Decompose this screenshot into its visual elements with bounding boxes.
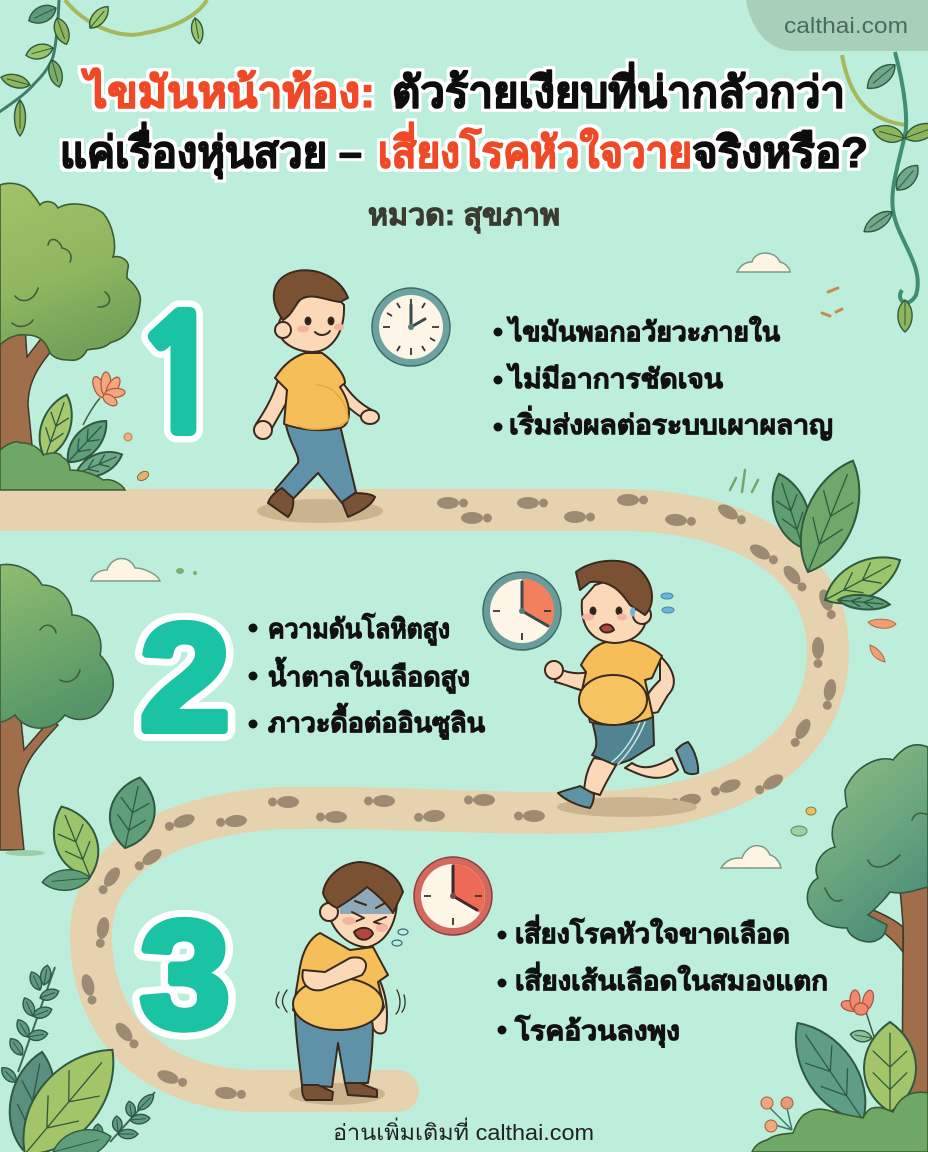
watermark badge: calthai.com — [784, 13, 908, 38]
title — [60, 62, 868, 180]
icon: orange flower — [90, 372, 125, 408]
clock 2 — [483, 572, 561, 650]
head — [278, 285, 344, 352]
bullets 2 — [248, 612, 486, 740]
bullets 3: เสี่ยงเส้นเลือดในสมองแตก — [515, 961, 828, 996]
character 1 walking — [254, 270, 383, 523]
clock 1 — [372, 288, 450, 366]
number 2: 2 — [140, 593, 230, 763]
tree top left — [0, 183, 140, 455]
shirt — [581, 640, 662, 725]
vines top right — [842, 52, 928, 332]
bullets 1: ไขมันพอกอวัยวะภายใน — [506, 316, 781, 347]
character 2 running — [545, 561, 698, 817]
bush bottom right — [752, 1092, 928, 1152]
head — [582, 575, 648, 643]
title: ตัวร้ายเงียบที่น่ากลัวกว่า — [392, 62, 845, 117]
clock 3 — [414, 857, 492, 935]
vines top left — [0, 0, 207, 136]
legs — [584, 758, 618, 795]
character 3 chest pain — [276, 862, 408, 1105]
right foliage middle — [730, 288, 908, 662]
foliage bottom left — [0, 964, 157, 1152]
shirt — [275, 353, 349, 430]
footprints — [79, 494, 838, 1101]
bullets 2: น้ำตาลในเลือดสูง — [268, 656, 470, 694]
bullets 2: ภาวะดื้อต่ออินซูลิน — [268, 702, 486, 740]
number 1: 1 — [132, 298, 228, 455]
tree bottom right — [807, 745, 928, 1110]
winding path — [0, 494, 838, 1101]
title: ไขมันหน้าท้อง: — [81, 67, 375, 117]
head — [327, 880, 397, 947]
mid leaves — [41, 773, 162, 892]
flower and leaves bottom right — [761, 989, 916, 1134]
number 3: 3 — [140, 890, 230, 1060]
arm on chest — [302, 957, 366, 990]
number 1: 1 — [132, 298, 228, 455]
watermark badge — [746, 0, 928, 51]
pants — [275, 425, 356, 503]
icon: pink flower — [840, 989, 875, 1015]
bullets 3: โรคอ้วนลงพุง — [514, 1014, 680, 1048]
number 2: 2 — [140, 593, 230, 763]
tree middle left — [0, 564, 113, 856]
bullets 1: ไม่มีอาการชัดเจน — [506, 363, 724, 394]
clouds — [91, 253, 816, 868]
right arm — [372, 975, 387, 1034]
bullets 1: เริ่มส่งผลต่อระบบเผาผลาญ — [509, 405, 833, 441]
title: แค่เรื่องหุ่นสวย – — [60, 122, 362, 180]
footer: อ่านเพิ่มเติมที่ calthai.com — [333, 1117, 594, 1145]
bullets 3 — [498, 914, 828, 1048]
bush top left with leaves and flower — [0, 372, 150, 490]
shirt — [293, 933, 388, 1030]
bullets 1 — [494, 316, 833, 441]
bullets 3: เสี่ยงโรคหัวใจขาดเลือด — [515, 914, 790, 949]
title: เสี่ยงโรคหัวใจวาย — [378, 122, 692, 177]
arms — [555, 668, 590, 692]
pants — [295, 1013, 373, 1087]
title: จริงหรือ? — [692, 129, 868, 177]
shorts — [592, 716, 654, 765]
number 3: 3 — [140, 890, 230, 1060]
bullets 2: ความดันโลหิตสูง — [268, 612, 450, 646]
arms — [256, 380, 295, 432]
category subtitle: หมวด: สุขภาพ — [368, 199, 560, 234]
